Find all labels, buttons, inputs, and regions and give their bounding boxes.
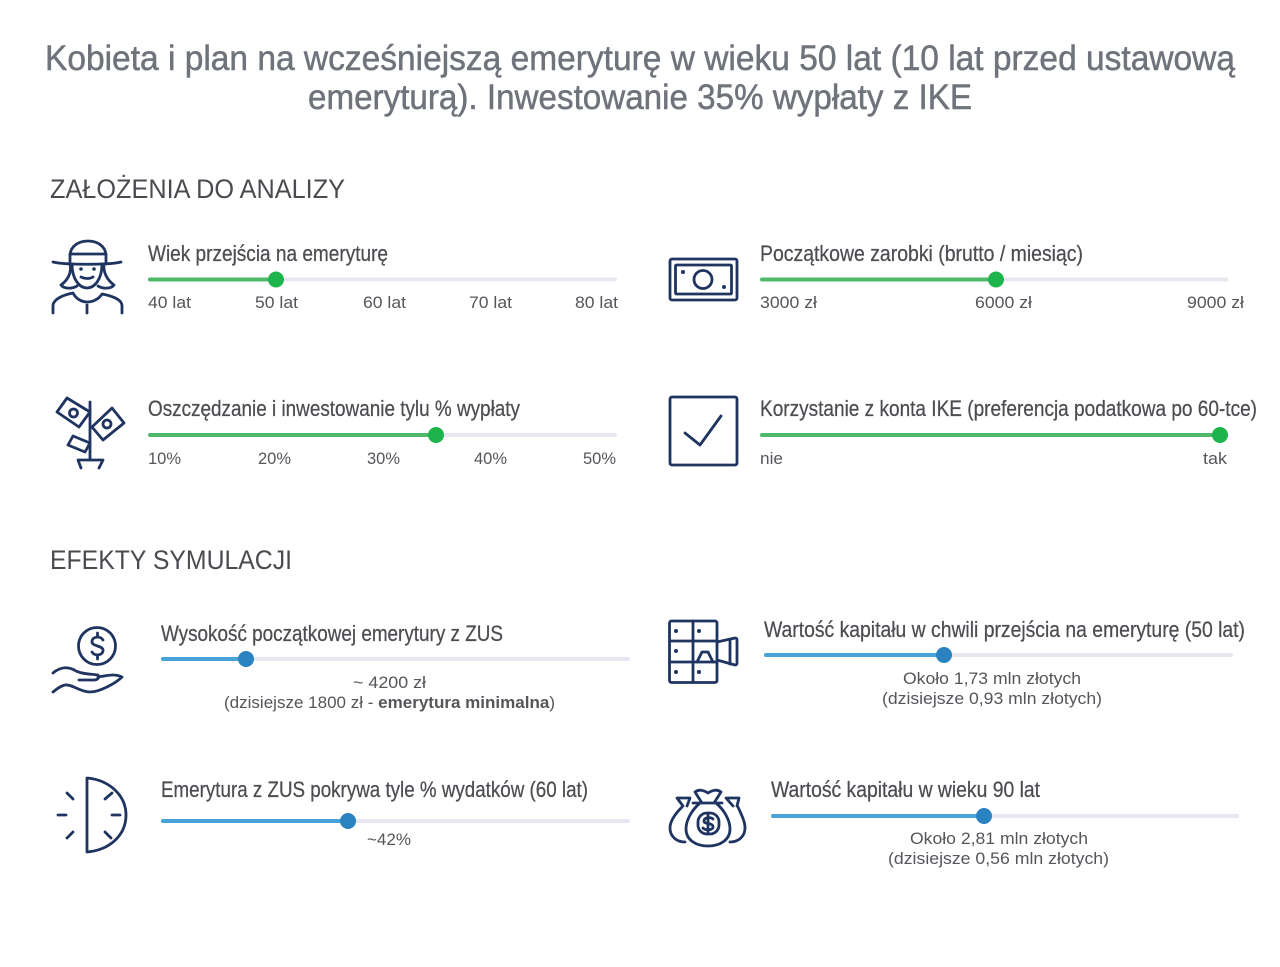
value text: [888, 830, 1109, 868]
panel: wartość kapitału w wieku 90 lat: [670, 777, 1239, 868]
scale: 30%: [367, 450, 400, 468]
scale: [760, 450, 1228, 468]
slider: [760, 272, 1228, 288]
icon: money bags: [670, 790, 745, 846]
title: Kobieta i plan na wcześniejszą emeryturę w wieku 50 lat (10 lat przed ustawową: [45, 39, 1236, 78]
scale: [148, 450, 616, 468]
panel: wysokość początkowej emerytury: [53, 621, 630, 712]
title: [45, 39, 1236, 117]
slider: [764, 647, 1233, 663]
value text: Około 1,73 mln złotych: [903, 670, 1081, 688]
value text: (dzisiejsze 0,93 mln złotych): [882, 690, 1102, 708]
slider: [148, 427, 617, 443]
heading: założenia do analizy: ZAŁOŻENIA DO ANALIZY: [50, 173, 345, 204]
label: Oszczędzanie i inwestowanie tylu % wypłaty: [148, 396, 520, 421]
value text: Około 2,81 mln złotych: [910, 830, 1088, 848]
heading: efekty symulacji: EFEKTY SYMULACJI: [50, 545, 292, 575]
panel: korzystanie z konta IKE: [670, 396, 1257, 468]
value text: (dzisiejsze 0,56 mln złotych): [888, 850, 1109, 868]
scale: 9000 zł: [1187, 294, 1244, 312]
scale: 40%: [474, 450, 507, 468]
value text: ~ 4200 zł: [353, 674, 426, 692]
icon: half clock: [58, 778, 126, 852]
label: Wysokość początkowej emerytury z ZUS: [161, 621, 503, 646]
panel: początkowe zarobki: [670, 241, 1244, 312]
scale: 10%: [148, 450, 181, 468]
scale: 50%: [583, 450, 616, 468]
label: Wartość kapitału w wieku 90 lat: [771, 777, 1040, 802]
icon: money plant: [57, 398, 124, 468]
label: Początkowe zarobki (brutto / miesiąc): [760, 241, 1083, 266]
panel: emerytura z ZUS pokrywa wydatki: [58, 777, 630, 852]
scale: 50 lat: [255, 294, 298, 312]
value text: [882, 670, 1102, 708]
scale: [148, 294, 618, 312]
slider: [161, 651, 630, 667]
icon: banknote: [670, 259, 737, 300]
label: Wiek przejścia na emeryturę: [148, 241, 388, 266]
scale: 6000 zł: [975, 294, 1032, 312]
panel: wartość kapitału w chwili przejścia: [670, 617, 1245, 708]
scale: tak: [1203, 450, 1228, 468]
value text: (dzisiejsze 1800 zł - emerytura minimalna ): [224, 694, 555, 712]
scale: 70 lat: [469, 294, 512, 312]
label: Emerytura z ZUS pokrywa tyle % wydatków (60 lat): [161, 777, 588, 802]
scale: 20%: [258, 450, 291, 468]
scale: 80 lat: [575, 294, 618, 312]
panel: oszczędzanie i inwestowanie: [57, 396, 617, 468]
title: emeryturą). Inwestowanie 35% wypłaty z IKE: [308, 78, 972, 117]
slider: [760, 427, 1228, 443]
icon: checkbox: [670, 397, 737, 465]
icon: safe deposit lockers: [670, 621, 737, 682]
value text: [224, 674, 555, 712]
value text: ~42%: [367, 831, 411, 849]
scale: [760, 294, 1244, 312]
panel: wiek przejścia na emeryturę: [53, 241, 618, 313]
scale: nie: [760, 450, 783, 468]
slider: [148, 272, 617, 288]
icon: coin over hand: [53, 628, 122, 692]
slider: [771, 808, 1239, 824]
slider: [161, 813, 630, 829]
scale: 40 lat: [148, 294, 191, 312]
scale: 3000 zł: [760, 294, 817, 312]
icon: woman with hat: [53, 241, 122, 313]
scale: 60 lat: [363, 294, 406, 312]
